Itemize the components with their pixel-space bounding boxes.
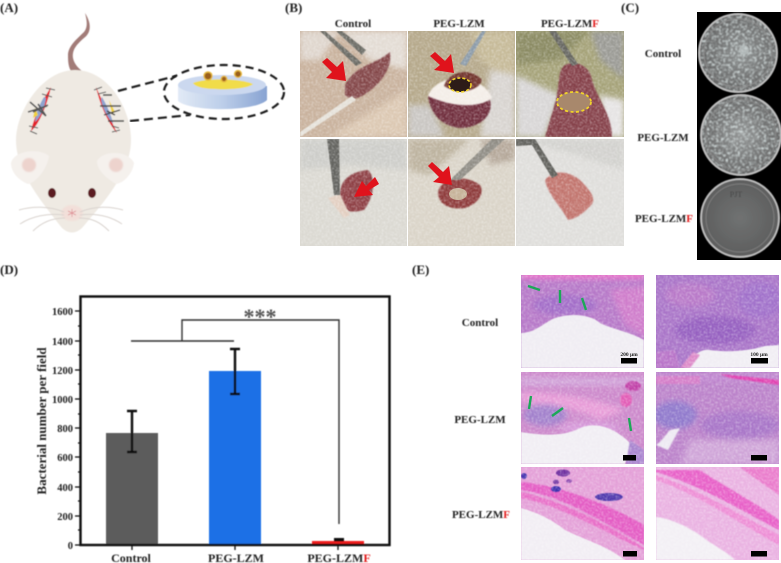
scale bar: 100 µm: 100 μm — [750, 352, 768, 358]
arrows: PEG-LZM green — [529, 396, 631, 431]
micrograph: PEG-LZM low magnification — [521, 372, 644, 464]
plate: control — [699, 14, 777, 92]
label: PEG-LZMF: PEG-LZMF — [452, 509, 510, 521]
heading: (E): (E) — [412, 262, 429, 277]
error bar: PEG-LZM — [230, 349, 240, 394]
y axis labels: 1600 — [52, 307, 73, 318]
illustration: mouse — [11, 13, 134, 232]
arrow: upper dashed connector — [118, 76, 176, 91]
label: Control: Control — [462, 317, 498, 329]
photo: control bottom — [300, 139, 407, 246]
heading: (D): (D) — [0, 262, 18, 277]
heading: (C): (C) — [621, 0, 639, 15]
y axis labels: 400 — [57, 483, 73, 494]
photo: PEG-LZMF top — [516, 31, 624, 137]
y axis labels: 800 — [57, 424, 73, 435]
y axis labels: 200 — [57, 512, 73, 523]
label: Control: Control — [335, 18, 371, 30]
plate background — [697, 12, 781, 260]
plate: PEG-LZMF: PJT — [730, 190, 742, 199]
bar: PEG-LZMF — [312, 541, 364, 545]
label: PEG-LZMF: PEG-LZMF — [541, 18, 599, 30]
panel: D bar chart — [0, 262, 390, 563]
y axis labels: 0 — [68, 541, 73, 552]
scale bar — [751, 455, 767, 460]
photo: PEG-LZM bottom — [408, 139, 515, 246]
heading: (B): (B) — [285, 0, 302, 15]
bar chart — [34, 296, 390, 563]
scale bar — [751, 551, 767, 556]
icon: left inner ear — [22, 158, 36, 172]
icon: body — [16, 70, 131, 232]
scale bar: 200 µm: 200 μm — [620, 352, 638, 358]
icon: left eye — [48, 188, 56, 198]
icon: right ear — [97, 153, 134, 184]
arrow: control top — [322, 58, 346, 81]
micrograph: control high magnification — [656, 275, 781, 368]
callout: dashed ellipse — [164, 65, 284, 119]
micrograph: PEG-LZM high magnification — [653, 372, 780, 464]
arrow: lower dashed connector — [130, 115, 190, 121]
arrows: control green — [528, 286, 586, 310]
icon: nose — [68, 209, 76, 217]
label: PEG-LZM: PEG-LZM — [433, 18, 485, 30]
y axis labels: 1200 — [52, 366, 73, 377]
y axis labels: 600 — [57, 453, 73, 464]
callout: PEG-LZM dashed disc outline — [449, 78, 471, 92]
significance bracket — [131, 320, 339, 524]
icon: right wound with sutures — [94, 87, 124, 133]
label: PEG-LZMF: PEG-LZMF — [635, 213, 693, 225]
bar: control — [106, 433, 158, 545]
icon: snout — [61, 205, 83, 221]
scale bar — [623, 455, 636, 460]
photo: PEG-LZMF bottom — [516, 139, 624, 246]
y axis title: Bacterial number per field — [34, 347, 49, 495]
arrow: PEG-LZM top — [430, 52, 454, 73]
callout: PEG-LZMF dashed disc outline — [557, 92, 591, 112]
icon: tail — [68, 13, 90, 71]
scale bar — [623, 551, 637, 556]
icon: bacteria — [204, 71, 241, 82]
y axis labels: 1000 — [52, 395, 73, 406]
heading: (A): (A) — [0, 0, 18, 15]
micrograph: PEG-LZMF high magnification — [656, 467, 779, 560]
error bar: PEG-LZMF — [334, 538, 344, 542]
icon: enlarged hydrogel disc — [178, 71, 267, 109]
scale bar: 100 µm — [750, 352, 768, 364]
arrow: control bottom — [354, 177, 379, 197]
panel: E histology — [412, 262, 781, 560]
icon: left ear — [11, 151, 49, 184]
label: Control: Control — [645, 48, 681, 60]
plate: PEG-LZM — [701, 95, 781, 175]
significance stars: *** — [244, 304, 276, 329]
y axis labels — [52, 307, 73, 552]
label: PEG-LZM: PEG-LZM — [454, 414, 506, 426]
micrograph: PEG-LZMF low magnification — [521, 467, 644, 560]
icon: right eye — [88, 188, 96, 198]
bar: PEG-LZM — [209, 371, 261, 545]
icon: yellow layer — [193, 79, 253, 89]
icon: whiskers — [19, 207, 123, 231]
micrograph: control low magnification — [521, 270, 650, 368]
icon: left wound with sutures — [28, 87, 55, 134]
y axis ticks — [75, 311, 338, 550]
scale bar: 200 µm — [620, 352, 638, 364]
photo: control top — [300, 31, 407, 137]
photo: PEG-LZM top — [408, 31, 515, 137]
icon: right inner ear — [109, 158, 123, 172]
chart frame — [80, 296, 390, 545]
plate: PEG-LZMF — [701, 179, 779, 257]
y axis labels: 1400 — [52, 337, 73, 348]
label: PEG-LZM: PEG-LZM — [637, 132, 689, 144]
error bar: control — [127, 411, 137, 452]
arrow: PEG-LZM bottom — [428, 162, 452, 185]
panel: A mouse implant schematic — [0, 0, 284, 232]
panel: C agar plates — [621, 0, 781, 260]
panel: B wound photographs — [285, 0, 624, 246]
